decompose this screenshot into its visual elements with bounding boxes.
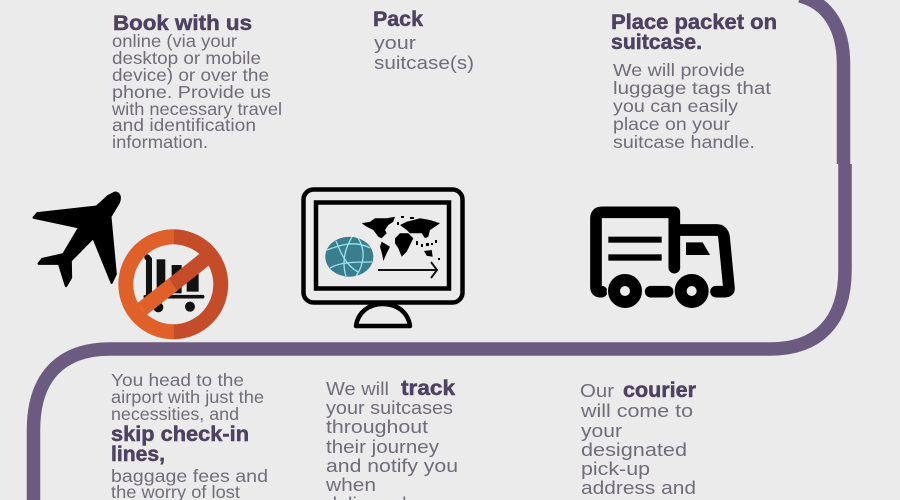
icon: delivery truck bbox=[596, 212, 729, 309]
step: book with us: with necessary travel bbox=[111, 99, 282, 119]
step: skip check-in: baggage fees and bbox=[111, 466, 268, 486]
step: track: track bbox=[401, 377, 455, 400]
step: courier: designated bbox=[581, 439, 687, 460]
globe bbox=[325, 237, 373, 277]
step: skip check-in: airport with just the bbox=[111, 387, 264, 407]
step: courier: courier bbox=[623, 379, 696, 402]
step: book with us: information. bbox=[112, 132, 208, 152]
step: place packet: suitcase handle. bbox=[613, 132, 755, 152]
step: place packet: luggage tags that bbox=[613, 78, 771, 98]
step: courier: will come to bbox=[580, 400, 693, 421]
icon: airplane bbox=[34, 193, 120, 286]
step: book with us bbox=[111, 12, 282, 152]
step: skip check-in: lines, bbox=[111, 443, 165, 466]
step: pack bbox=[373, 8, 474, 73]
step: place packet: you can easily bbox=[613, 96, 738, 116]
step: courier bbox=[580, 379, 696, 500]
step: courier: pick-up bbox=[581, 458, 650, 479]
step: track: your suitcases bbox=[326, 397, 453, 418]
step: skip check-in: You head to the bbox=[111, 370, 244, 390]
step: place packet bbox=[611, 11, 777, 152]
step: place packet: Place packet on bbox=[611, 11, 777, 34]
step: track bbox=[325, 377, 458, 500]
step: book with us: Book with us bbox=[113, 12, 252, 35]
step: book with us: and identification bbox=[112, 115, 256, 135]
step: track: their journey bbox=[326, 436, 440, 457]
step: book with us: desktop or mobile bbox=[112, 48, 261, 68]
step: courier: your bbox=[581, 420, 622, 441]
step: pack: suitcase(s) bbox=[374, 52, 474, 73]
step: pack: your bbox=[374, 32, 416, 53]
step: track: throughout bbox=[326, 416, 428, 437]
step: skip check-in: necessities, and bbox=[111, 404, 239, 424]
step: place packet: place on your bbox=[613, 114, 730, 134]
step: skip check-in bbox=[111, 370, 268, 500]
icon: monitor with globe and map bbox=[304, 190, 462, 326]
step: book with us: phone. Provide us bbox=[112, 82, 271, 102]
step: track: We will bbox=[326, 378, 389, 399]
connector path: top right curve bbox=[800, 0, 844, 164]
step: track: and notify you bbox=[326, 455, 458, 476]
world map bbox=[362, 216, 440, 261]
step: place packet: suitcase. bbox=[611, 31, 702, 54]
step: pack: Pack bbox=[373, 8, 423, 31]
step: place packet: We will provide bbox=[613, 60, 745, 80]
icon: no luggage cart sign bbox=[118, 229, 228, 339]
connector path: right side to lower left bbox=[34, 164, 845, 500]
step: book with us: device) or over the bbox=[112, 65, 269, 85]
step: courier: address and bbox=[581, 477, 696, 498]
step: courier: Our bbox=[580, 380, 614, 401]
step: book with us: online (via your bbox=[112, 31, 237, 51]
arrow bbox=[378, 262, 437, 278]
step: track: when bbox=[325, 474, 376, 495]
step: skip check-in: skip check-in bbox=[111, 423, 249, 446]
